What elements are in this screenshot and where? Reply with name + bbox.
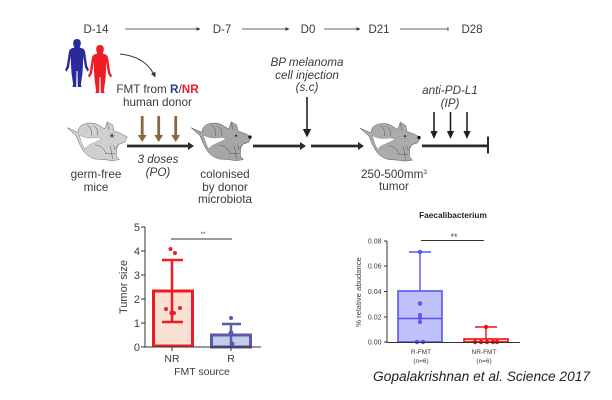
text: mouse and dosing labels: tumor (379, 180, 409, 193)
tick labels: 3 (134, 270, 140, 282)
FMT label: human donor (123, 96, 192, 109)
error bars (162, 260, 183, 322)
axes (141, 227, 261, 351)
text: mouse and dosing labels: (IP) (441, 97, 460, 110)
anti-PD-L1 arrows (430, 112, 471, 139)
tick labels: 0.02 (368, 314, 382, 322)
text: mouse and dosing labels: 3 (423, 169, 427, 176)
icon: human donors (65, 39, 112, 93)
text: mouse and dosing labels: germ-free (71, 168, 121, 181)
significance (421, 240, 484, 242)
text: mouse and dosing labels: microbiota (198, 193, 252, 206)
text: mouse and dosing labels: by donor (202, 181, 248, 194)
mouse: germ-free (67, 122, 127, 161)
box plot: relative abundance: (n=6) (476, 358, 492, 365)
tick labels: 1 (134, 318, 140, 330)
box plot: relative abundance: (n=6) (413, 358, 429, 365)
tick labels: 5 (134, 222, 140, 234)
bar chart: tumor size: R (227, 353, 235, 365)
timeline (84, 24, 483, 36)
brown dose arrows (138, 116, 180, 142)
text: mouse and dosing labels: cell injection (275, 69, 339, 82)
chart title: Faecalibacterium (419, 210, 487, 220)
text: mouse and dosing labels: mice (84, 181, 108, 194)
box plot: relative abundance: NR-FMT (472, 349, 496, 356)
box plot: relative abundance: ** (450, 232, 458, 242)
tick labels: 2 (134, 294, 140, 306)
tick labels (134, 222, 140, 354)
tick labels: 0.06 (368, 264, 382, 270)
tick labels: 0.04 (368, 289, 382, 296)
data points (164, 247, 182, 316)
bar chart: tumor size: NR (164, 353, 180, 365)
injection arrow (303, 97, 311, 138)
arrow: donor to FMT (120, 54, 155, 77)
text: mouse and dosing labels: anti-PD-L1 (422, 84, 478, 97)
axes (384, 241, 520, 342)
timeline: D-14 (84, 24, 109, 36)
significance (171, 238, 232, 240)
text: mouse and dosing labels: (PO) (146, 166, 170, 179)
text: mouse and dosing labels: (s.c) (296, 81, 318, 94)
bar chart: tumor size (118, 222, 261, 378)
bar chart: tumor size: ** (201, 232, 206, 238)
timeline: D21 (368, 24, 390, 36)
tick labels: 0.08 (368, 238, 382, 246)
mouse: colonised (191, 122, 252, 161)
citation: Gopalakrishnan et al. Science 2017 (373, 369, 590, 384)
timeline: D0 (301, 24, 315, 36)
text: mouse and dosing labels: colonised (200, 168, 250, 181)
text: mouse and dosing labels (71, 56, 478, 206)
bars (154, 291, 250, 347)
boxes (398, 291, 442, 342)
tick labels: 0 (134, 342, 140, 354)
text: mouse and dosing labels: 250-500mm (361, 168, 423, 181)
tick labels: 0.00 (368, 340, 382, 346)
axis title: % relative abudance (354, 257, 363, 327)
text: mouse and dosing labels: 3 doses (138, 153, 178, 166)
axis title: Tumor size (118, 260, 130, 314)
tick labels (368, 238, 382, 346)
timeline: D-7 (213, 24, 231, 36)
FMT label: FMT from R/NR (116, 83, 199, 96)
timeline: D28 (461, 24, 483, 36)
whiskers and medians (398, 252, 442, 318)
bar chart: tumor size: FMT source (174, 366, 230, 378)
data points (415, 250, 425, 344)
box plot: relative abundance (354, 232, 520, 365)
mouse: tumor (360, 122, 421, 161)
tick labels: 4 (134, 246, 140, 258)
box plot: relative abundance: R-FMT (411, 349, 431, 356)
main timeline arrows (127, 136, 489, 154)
text: mouse and dosing labels: BP melanoma (271, 56, 343, 69)
